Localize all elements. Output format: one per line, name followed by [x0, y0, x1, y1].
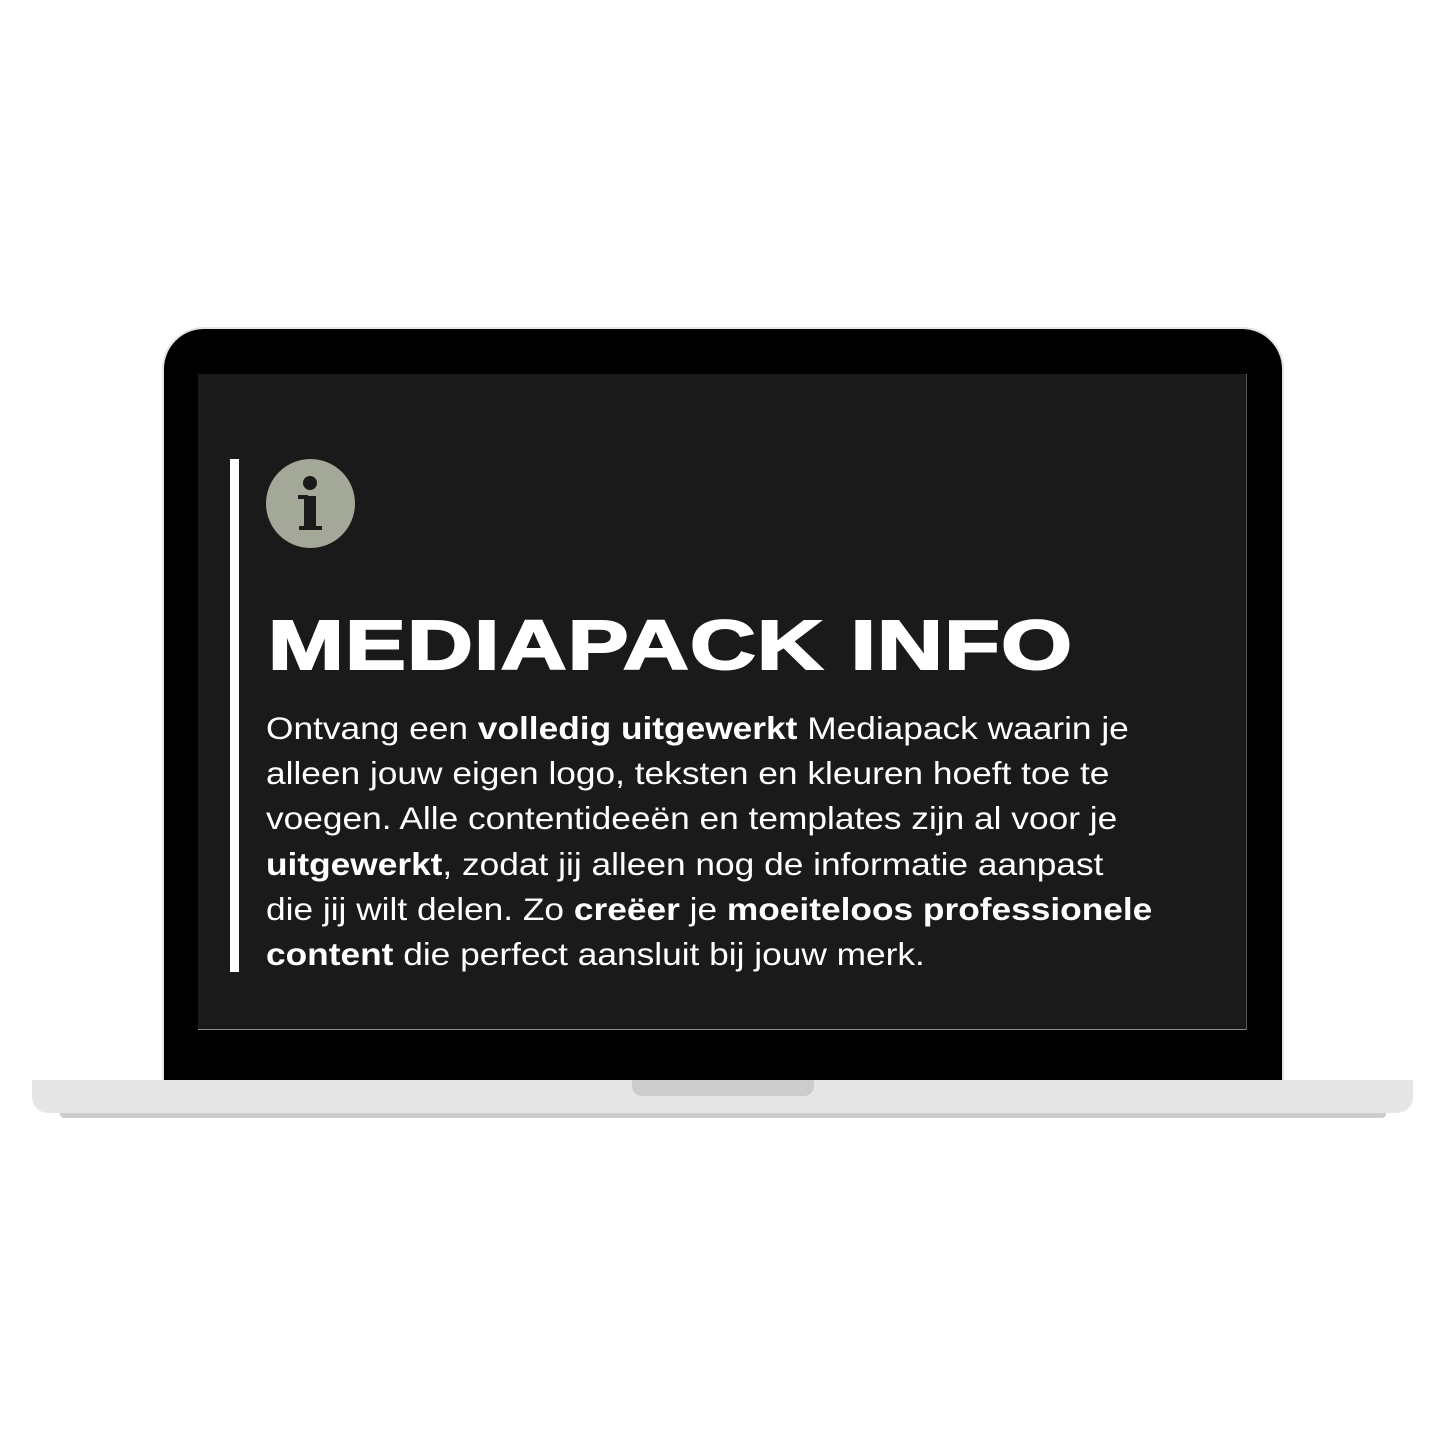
body text: uitgewerkt, zodat jij alleen nog de informatie aanpast — [266, 846, 1103, 882]
body text: Ontvang een volledig uitgewerkt Mediapack waarin je — [266, 710, 1129, 746]
body text — [266, 710, 1152, 972]
title: MEDIAPACK INFO — [268, 606, 1073, 684]
trackpad notch — [632, 1080, 814, 1096]
laptop — [32, 327, 1413, 1118]
laptop lid — [162, 327, 1284, 1089]
laptop base — [32, 1080, 1413, 1113]
accent bar — [230, 459, 239, 972]
body text: voegen. Alle contentideeën en templates zijn al voor je — [266, 800, 1117, 836]
icon: info — [266, 459, 355, 548]
screen — [198, 374, 1247, 1030]
laptop base shadow — [60, 1105, 1386, 1118]
body text: alleen jouw eigen logo, teksten en kleuren hoeft toe te — [266, 755, 1109, 791]
body text: content die perfect aansluit bij jouw merk. — [266, 936, 925, 972]
body text: die jij wilt delen. Zo creëer je moeiteloos professionele — [266, 891, 1152, 927]
